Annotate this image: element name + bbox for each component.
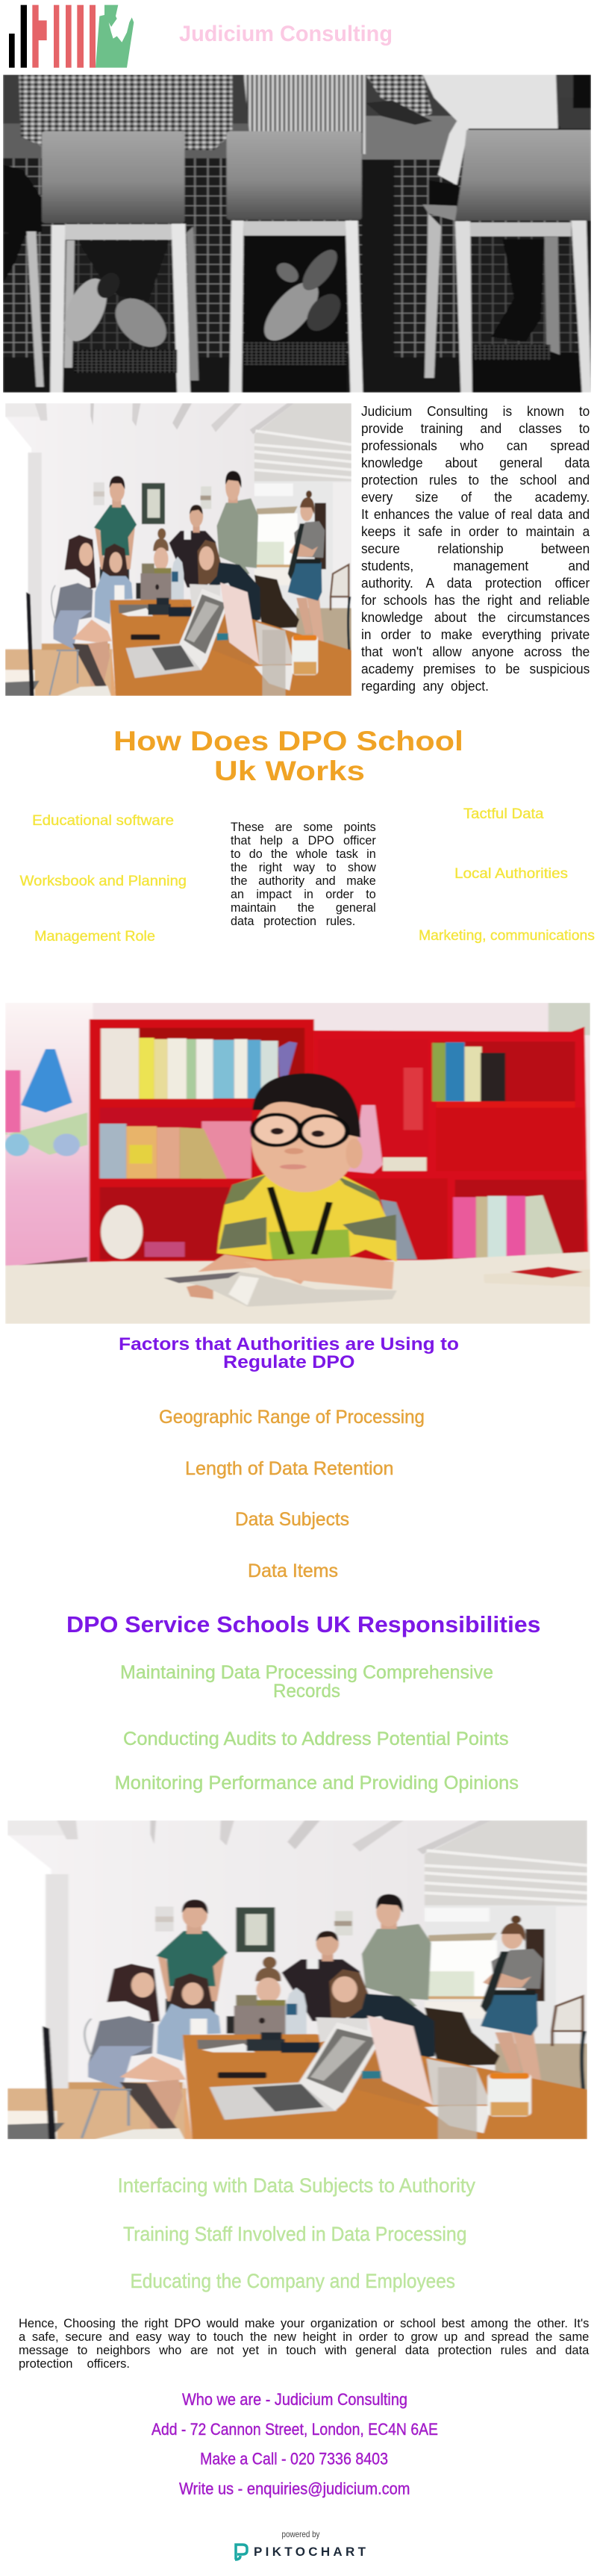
points paragraph: to do the whole task in	[231, 847, 376, 861]
heading: how does DPO school UK works: How Does DPO School	[113, 726, 463, 756]
closing paragraph: a safe, secure and easy way to touch the new height in order to grow up and spread the same	[18, 2330, 589, 2344]
heading: how does DPO school UK works: Uk Works	[214, 756, 365, 786]
intro paragraph: Judicium Consulting is known to	[361, 404, 590, 419]
heading: how does DPO school UK works	[113, 726, 463, 786]
table	[110, 600, 351, 696]
intro paragraph: It enhances the value of real data and	[361, 507, 590, 522]
points paragraph: an impact in order to	[231, 887, 376, 901]
foot rests	[74, 349, 177, 373]
points paragraph: the authority and make	[231, 874, 376, 888]
open laptop	[126, 644, 202, 678]
intro paragraph: in order to make everything private	[361, 627, 590, 642]
woman dark jacket	[198, 540, 222, 585]
shoes	[57, 276, 115, 344]
middle-left books	[100, 1124, 126, 1178]
closing paragraph: protection officers.	[18, 2356, 129, 2371]
right point: local authorities: Local Authorities	[454, 866, 568, 882]
woman striped shirt	[102, 544, 128, 577]
responsibility: interfacing: Interfacing with Data Subjects to Authority	[118, 2174, 475, 2197]
intro paragraph: protection rules to the school and	[361, 473, 590, 488]
intro paragraph: provide training and classes to	[361, 421, 590, 436]
powered by label: powered by	[282, 2529, 319, 2539]
heading: factors that authorities are using: Factors that Authorities are Using to	[119, 1334, 459, 1354]
woman seated left	[64, 535, 96, 590]
points paragraph	[231, 820, 376, 928]
man green shirt	[100, 567, 129, 581]
responsibility: monitoring performance: Monitoring Performance and Providing Opinions	[115, 1773, 519, 1793]
responsibility: comprehensive records	[120, 1662, 493, 1702]
right point: tactful data: Tactful Data	[463, 806, 544, 822]
wall lamps and picture	[93, 482, 104, 505]
carpet	[5, 1252, 590, 1324]
points paragraph: data protection rules.	[231, 914, 355, 928]
top-left books	[101, 1028, 139, 1099]
man grey sweater	[217, 498, 258, 573]
left point: management role: Management Role	[34, 929, 155, 945]
closing paragraph: message to neighbors who are not yet in touch with general data protection rules and data	[18, 2343, 589, 2357]
responsibility: conducting audits: Conducting Audits to Address Potential Points	[123, 1729, 509, 1749]
intro paragraph: every size of the academy.	[361, 490, 590, 505]
books on carpet	[484, 1269, 590, 1287]
contact: who we are: Who we are - Judicium Consulting	[182, 2390, 407, 2409]
boy arms	[198, 1254, 304, 1284]
compartments	[101, 1028, 304, 1099]
window	[5, 416, 31, 672]
silver laptop	[140, 573, 172, 601]
responsibility: comprehensive records: Maintaining Data Processing Comprehensive	[120, 1662, 493, 1683]
glass and mug	[254, 665, 294, 691]
responsibility: training staff: Training Staff Involved in Data Processing	[123, 2223, 467, 2245]
contact: address: Add - 72 Cannon Street, London, EC4N 6AE	[151, 2420, 438, 2439]
floor	[296, 608, 351, 654]
intro paragraph: that won't allow anyone across the	[361, 644, 590, 659]
factor: data items: Data Items	[248, 1561, 338, 1581]
beams	[35, 403, 47, 420]
closing paragraph: Hence, Choosing the right DPO would make your organization or school best among the other. It's	[18, 2316, 589, 2330]
points paragraph: These are some points	[231, 820, 376, 834]
intro paragraph: authority. A data protection officer	[361, 576, 590, 591]
intro paragraph: students, management and	[361, 559, 590, 573]
points paragraph: that help a DPO officer	[231, 833, 376, 847]
woman black top	[169, 531, 218, 588]
heading: factors that authorities are using: Regulate DPO	[223, 1352, 355, 1372]
under-seat shadows	[65, 240, 173, 392]
piktochart logo: PIKTOCHART	[254, 2545, 366, 2559]
intro paragraph: knowledge about the circumstances	[361, 610, 590, 625]
alcove	[254, 403, 351, 482]
factor: geographic range: Geographic Range of Processing	[159, 1407, 425, 1428]
heading: DPO service responsibilities: DPO Service Schools UK Responsibilities	[66, 1611, 540, 1637]
pink laptop	[220, 582, 260, 665]
closing paragraph	[18, 2316, 590, 2371]
bookshelf	[90, 1019, 314, 1262]
chairs	[42, 131, 184, 223]
photo: team around laptop table (small)	[5, 403, 351, 696]
factor: data retention: Length of Data Retention	[185, 1458, 394, 1479]
woman with bun at laptop	[157, 529, 166, 539]
photo: team around laptop table (wide)	[7, 1820, 587, 2139]
intro paragraph: regarding any object.	[361, 679, 489, 694]
chair left foreground	[26, 592, 34, 696]
factor: data subjects: Data Subjects	[235, 1509, 349, 1530]
heading: factors that authorities are using	[119, 1334, 459, 1372]
intro paragraph: keeps it safe in order to maintain a	[361, 524, 590, 539]
teddy and pink items	[101, 1205, 143, 1259]
points paragraph: maintain the general	[231, 900, 376, 915]
boy glasses	[252, 1115, 300, 1145]
intro paragraph: secure relationship between	[361, 541, 590, 556]
photo: boy with round glasses and red bookshelf	[5, 1003, 590, 1324]
responsibility: educating: Educating the Company and Employees	[130, 2270, 455, 2292]
wicker chair	[254, 575, 299, 629]
left point: workbook and planning: Worksbook and Planning	[19, 874, 187, 889]
intro paragraph: professionals who can spread	[361, 438, 590, 453]
logo	[9, 4, 134, 68]
responsibility: comprehensive records: Records	[273, 1681, 340, 1702]
right chairs	[331, 564, 348, 610]
open book	[163, 1272, 397, 1307]
brand title: Judicium Consulting	[179, 22, 393, 46]
intro paragraph: knowledge about general data	[361, 455, 590, 470]
contact: phone: Make a Call - 020 7336 8403	[200, 2450, 388, 2468]
contact: email: Write us - enquiries@judicium.com	[179, 2480, 410, 2498]
right point: marketing, communications: Marketing, communications	[419, 928, 595, 944]
bottom-right books	[453, 1197, 476, 1258]
intro paragraph: academy premises to be suspicious	[361, 662, 590, 676]
intro paragraph: for schools has the right and reliable	[361, 593, 590, 608]
water bottle	[172, 556, 184, 606]
photo: bar stools black and white	[3, 75, 591, 393]
points paragraph: the right way to show	[231, 860, 376, 874]
left point: educational software: Educational software	[32, 813, 174, 829]
top-right books	[432, 1043, 446, 1101]
woman standing right	[296, 597, 325, 652]
boy shirt	[217, 1174, 397, 1262]
intro paragraph	[361, 404, 590, 694]
boy head	[251, 1090, 358, 1192]
